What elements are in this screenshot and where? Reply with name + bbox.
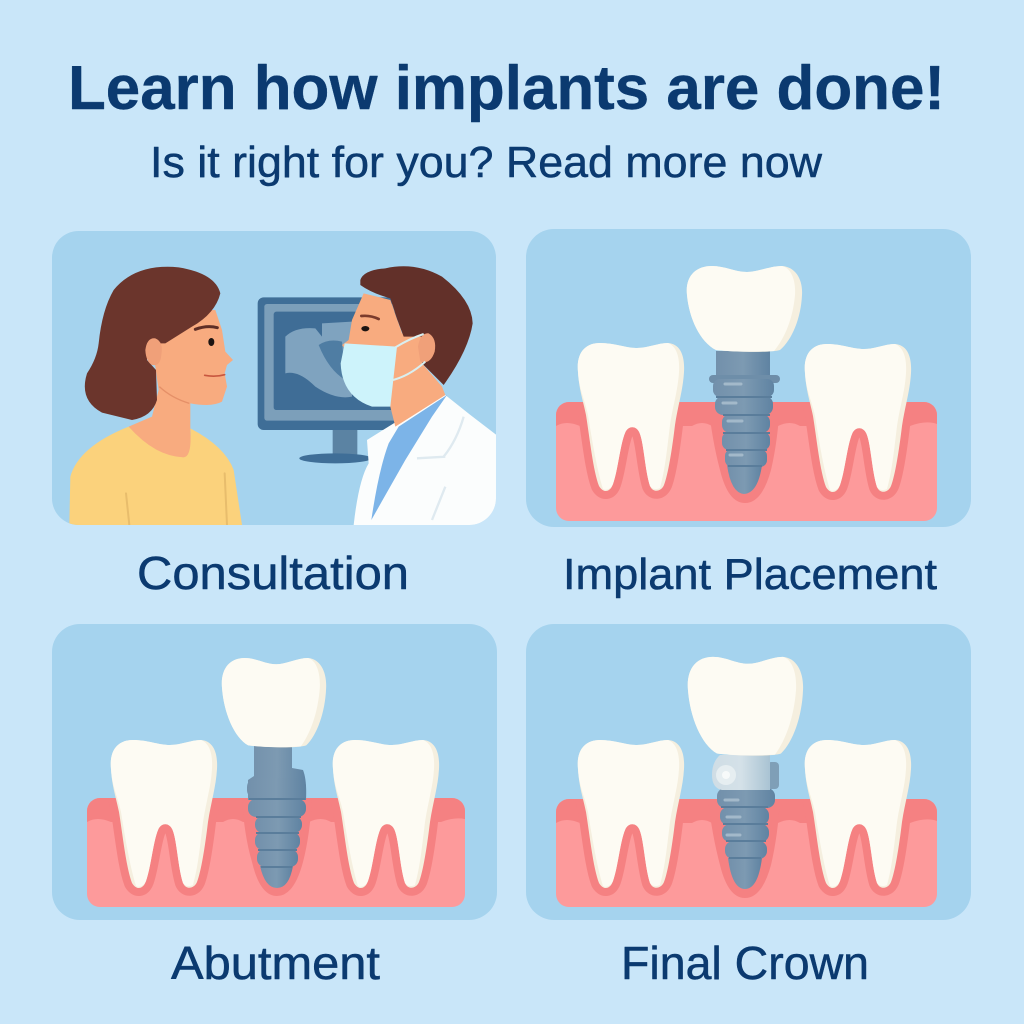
title: Learn how implants are done! bbox=[68, 54, 945, 123]
right tooth bbox=[805, 740, 911, 888]
dentist: face and neck bbox=[342, 293, 445, 427]
crown bbox=[688, 657, 803, 756]
crown bbox=[222, 658, 326, 747]
silver abutment bbox=[712, 755, 779, 790]
woman: hair bbox=[85, 267, 220, 420]
dentist: surgical mask bbox=[341, 343, 397, 407]
right tooth bbox=[805, 344, 911, 492]
gum bbox=[87, 798, 465, 907]
shirt folds bbox=[126, 473, 227, 525]
panel: abutment bbox=[52, 624, 497, 920]
gum bbox=[556, 799, 937, 907]
dentist: white coat bbox=[354, 395, 499, 527]
dentist: blue shirt bbox=[371, 395, 447, 520]
screw bbox=[717, 788, 775, 889]
woman: face and neck bbox=[129, 310, 233, 457]
label: Consultation: Consultation bbox=[137, 547, 409, 599]
dentist: coat shading bbox=[417, 417, 464, 520]
implant screw bbox=[709, 351, 780, 494]
label: Final Crown: Final Crown bbox=[621, 937, 869, 989]
panel background bbox=[52, 624, 497, 920]
subtitle: Is it right for you? Read more now bbox=[150, 138, 822, 187]
woman: ear bbox=[145, 338, 162, 365]
dentist: eye and brow bbox=[361, 316, 379, 331]
dentist: mask ear loops bbox=[390, 334, 425, 381]
left tooth bbox=[578, 343, 684, 491]
woman: jaw line bbox=[159, 387, 189, 403]
panel background bbox=[526, 229, 971, 527]
crown bbox=[687, 266, 802, 352]
left tooth bbox=[111, 740, 217, 888]
gum bbox=[556, 402, 937, 521]
label: Implant Placement: Implant Placement bbox=[563, 550, 937, 599]
icon: x-ray monitor bbox=[258, 297, 398, 463]
left tooth bbox=[578, 740, 684, 888]
right tooth bbox=[333, 740, 439, 888]
panel: implant placement bbox=[526, 229, 971, 527]
panel: final crown bbox=[526, 624, 971, 920]
illustration: patient and dentist bbox=[69, 266, 499, 527]
label: Abutment: Abutment bbox=[171, 937, 380, 989]
dentist: hair bbox=[360, 266, 473, 385]
dentist: ear bbox=[418, 333, 435, 362]
woman: shirt bbox=[69, 427, 242, 525]
panel background bbox=[526, 624, 971, 920]
panel: consultation bbox=[52, 231, 499, 527]
abutment and screw bbox=[247, 745, 306, 888]
panel background bbox=[52, 231, 496, 525]
woman: eye, brow and mouth bbox=[195, 327, 225, 376]
